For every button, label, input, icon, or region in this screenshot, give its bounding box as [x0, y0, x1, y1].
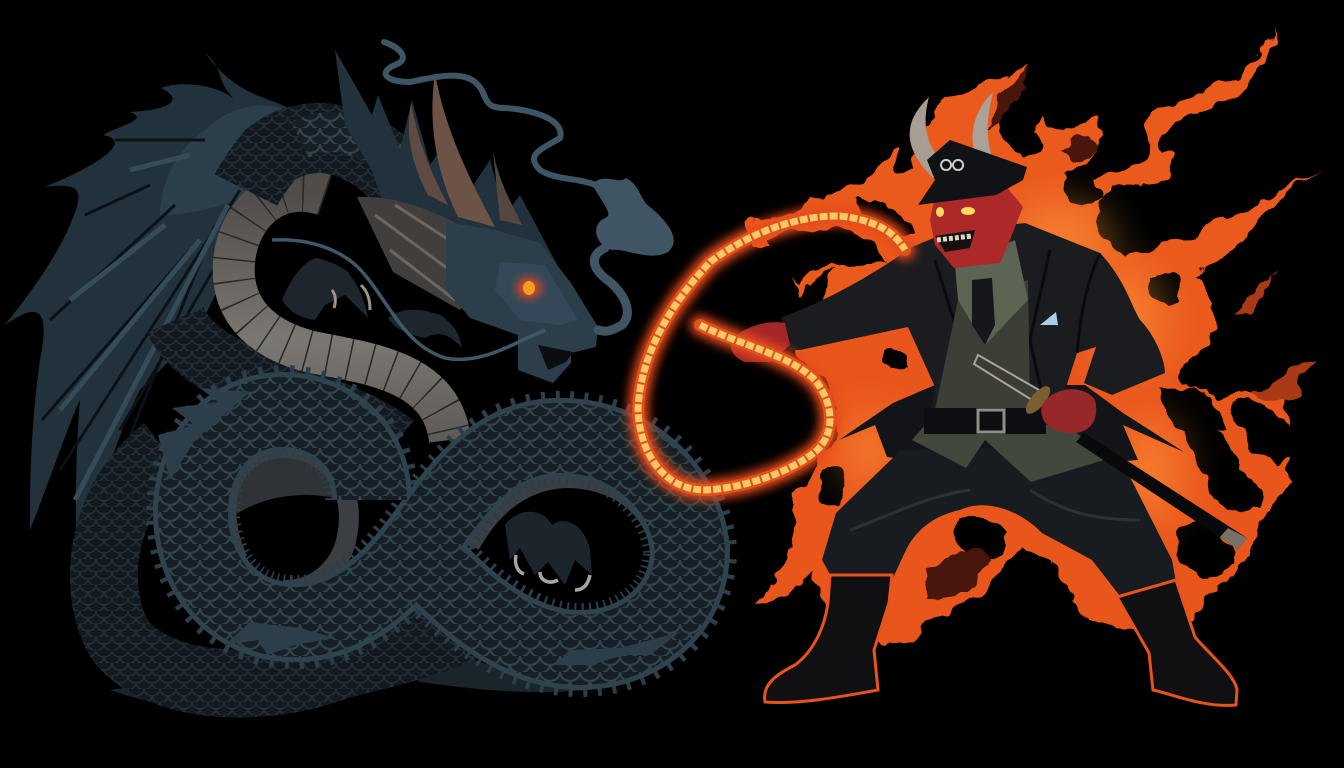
left hand — [731, 322, 790, 362]
sword guard — [1022, 382, 1054, 418]
mouth — [935, 230, 975, 252]
flame dark red blobs — [925, 63, 1095, 602]
whip cord edge — [638, 216, 905, 490]
jacket — [782, 223, 1165, 440]
dragon wing feathers — [5, 53, 295, 575]
dragon head crest horns — [335, 50, 560, 310]
flame lower mass — [755, 300, 1295, 648]
flames — [735, 30, 1318, 665]
peaked cap — [918, 140, 1027, 205]
dragon neck scales — [246, 138, 420, 215]
dragon eye — [517, 278, 541, 298]
dragon main S coil scales — [193, 412, 690, 650]
right hand — [1041, 389, 1096, 433]
right boot — [1117, 580, 1237, 705]
flame upper mass — [745, 30, 1318, 440]
flame bright core — [845, 205, 1180, 520]
dragon mouth — [538, 345, 573, 370]
belt — [924, 408, 1046, 434]
dragon lower claw — [505, 512, 592, 590]
dragon smoke — [384, 42, 674, 331]
tie — [972, 278, 995, 345]
pocket square — [1040, 312, 1058, 325]
whip cord core — [638, 216, 905, 490]
belt buckle — [978, 410, 1004, 432]
dragon head — [446, 222, 598, 383]
sword handle — [974, 355, 1046, 405]
dragon whisker — [272, 240, 545, 359]
cap badge — [941, 160, 963, 170]
whip — [638, 216, 905, 490]
dragon main S coil outline — [193, 412, 690, 650]
flame far tendrils — [1234, 273, 1318, 400]
dragon coil fringe — [193, 412, 690, 650]
right horn — [973, 92, 1000, 175]
vest apron — [912, 425, 1104, 482]
head — [930, 185, 1023, 268]
dragon neck lower scales — [175, 320, 395, 445]
oni — [731, 92, 1247, 705]
vest — [935, 280, 1030, 410]
sheath tip — [1220, 528, 1247, 549]
flame dark holes — [735, 128, 1293, 665]
sword sheath — [1076, 433, 1247, 549]
oni coat tails — [839, 385, 1184, 470]
dragon outer lower coil — [104, 450, 470, 684]
trousers — [822, 445, 1176, 600]
dragon — [5, 42, 690, 710]
dragon coil spines — [158, 388, 680, 665]
left horn — [910, 97, 945, 178]
flame arch underside hole — [895, 548, 1056, 665]
whip glow — [638, 216, 905, 490]
dragon upper claw — [282, 258, 462, 348]
dragon coil bellies — [226, 448, 662, 632]
dragon ground splashes — [110, 640, 590, 710]
left boot — [765, 575, 892, 703]
dragon neck belly — [234, 191, 450, 440]
dragon left coil back belly — [232, 442, 345, 515]
glowing eyes — [936, 207, 975, 217]
shirt — [955, 240, 1028, 345]
